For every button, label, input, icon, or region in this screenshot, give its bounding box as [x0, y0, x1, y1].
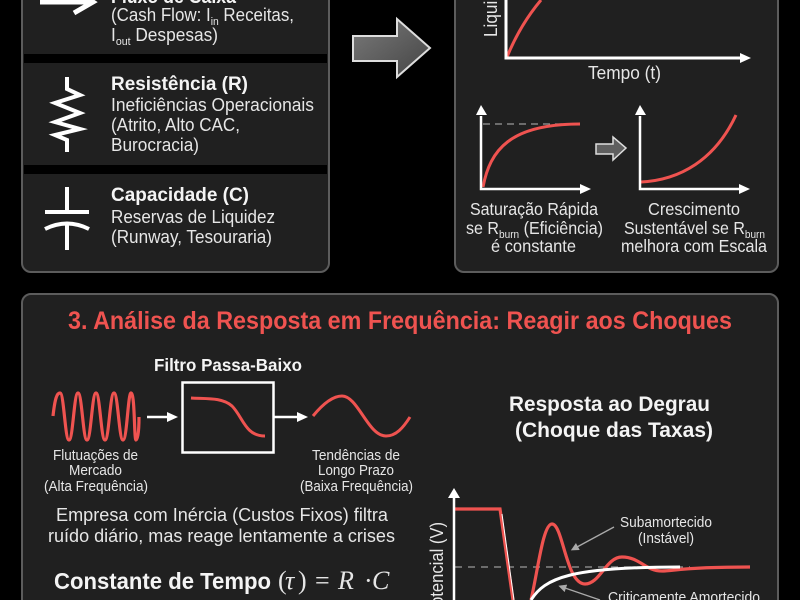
text: cash flow	[111, 0, 294, 48]
text: cash flow: Despesas)	[131, 25, 218, 45]
text: inertia explanation: ruído diário, mas reage lentamente a crises	[48, 526, 395, 546]
panel: liquidity growth charts	[455, 0, 778, 272]
caption: sustainable growth: burn	[745, 229, 765, 241]
arrow: into filter	[147, 416, 168, 418]
heading: section 3: 3. Análise da Resposta em Frequência: Reagir aos Choques	[68, 307, 732, 335]
main chart: liquidity over time: Tempo (t)	[588, 63, 661, 83]
text: cash flow: Receitas,	[219, 5, 294, 25]
formula: time constant: =	[315, 566, 330, 595]
formula: time constant: C	[372, 566, 390, 595]
heading: step response: Resposta ao Degrau	[509, 392, 710, 416]
formula: time constant: Constante de Tempo	[54, 568, 271, 594]
text: capacity: Capacidade (C)	[111, 184, 249, 206]
filter box	[182, 382, 274, 452]
label: market fluctuations	[44, 448, 148, 495]
caption: sustainable growth	[621, 199, 767, 256]
icon: cash flow arrow	[40, 0, 93, 13]
callout: underdamped	[577, 515, 712, 547]
text: resistance: (Atrito, Alto CAC,	[111, 115, 240, 135]
label: market fluctuations: Mercado	[69, 463, 122, 479]
heading: low-pass filter: Filtro Passa-Baixo	[154, 355, 302, 375]
text: capacity: Reservas de Liquidez	[111, 207, 275, 227]
text: capacity	[111, 184, 275, 247]
formula: time constant: ·	[364, 566, 373, 595]
icon: resistor	[55, 77, 80, 152]
caption: sustainable growth: melhora com Escala	[621, 236, 767, 256]
text: cash flow: I	[111, 25, 116, 45]
text: cash flow: (Cash Flow: I	[111, 5, 217, 25]
caption: fast saturation: (Eficiência)	[519, 218, 603, 238]
text: resistance	[111, 73, 314, 155]
text: inertia explanation	[48, 505, 395, 546]
callout: underdamped: Subamortecido	[620, 515, 712, 531]
formula: time constant: R	[337, 566, 354, 595]
heading: step response: (Choque das Taxas)	[515, 418, 713, 442]
small chart: sustainable growth	[635, 105, 740, 189]
panel: frequency response	[22, 294, 778, 600]
formula: time constant	[54, 566, 390, 595]
callout: critically damped	[565, 588, 760, 600]
caption: fast saturation: Saturação Rápida	[470, 199, 598, 219]
panel: circuit components	[22, 0, 329, 272]
arrow: out of filter	[274, 416, 298, 418]
icon: high-frequency wave	[53, 393, 139, 440]
text: resistance: Ineficiências Operacionais	[111, 95, 314, 115]
chart: step response	[427, 488, 760, 600]
caption: fast saturation: burn	[499, 229, 519, 241]
formula: time constant: )	[298, 566, 307, 595]
label: long-term trends	[300, 448, 413, 495]
main chart: liquidity over time	[481, 0, 741, 83]
text: capacity: (Runway, Tesouraria)	[111, 227, 272, 247]
icon: low-frequency wave	[313, 396, 410, 436]
formula: time constant: (	[278, 566, 287, 595]
callout: underdamped: (Instável)	[638, 531, 694, 547]
label: market fluctuations: (Alta Frequência)	[44, 479, 148, 495]
caption: fast saturation: se R	[466, 218, 502, 238]
text: resistance: Burocracia)	[111, 135, 199, 155]
caption: sustainable growth: Sustentável se R	[624, 218, 756, 238]
text: inertia explanation: Empresa com Inércia (Custos Fixos) filtra	[56, 505, 389, 525]
label: market fluctuations: Flutuações de	[53, 448, 138, 464]
label: long-term trends: Longo Prazo	[318, 463, 394, 479]
formula: time constant: τ	[285, 566, 296, 595]
text: cash flow: out	[116, 36, 131, 48]
text: cash flow: in	[211, 16, 219, 28]
arrow: between small charts	[596, 137, 626, 160]
text: resistance: Resistência (R)	[111, 73, 248, 95]
caption: sustainable growth: Crescimento	[648, 199, 740, 219]
arrow: from components to charts	[353, 19, 430, 77]
caption: fast saturation: é constante	[491, 236, 576, 256]
label: long-term trends: Tendências de	[312, 448, 400, 464]
icon: capacitor	[45, 187, 89, 250]
caption: fast saturation	[466, 199, 603, 256]
heading: step response	[509, 392, 713, 442]
label: long-term trends: (Baixa Frequência)	[300, 479, 413, 495]
small chart: fast saturation	[476, 105, 581, 189]
